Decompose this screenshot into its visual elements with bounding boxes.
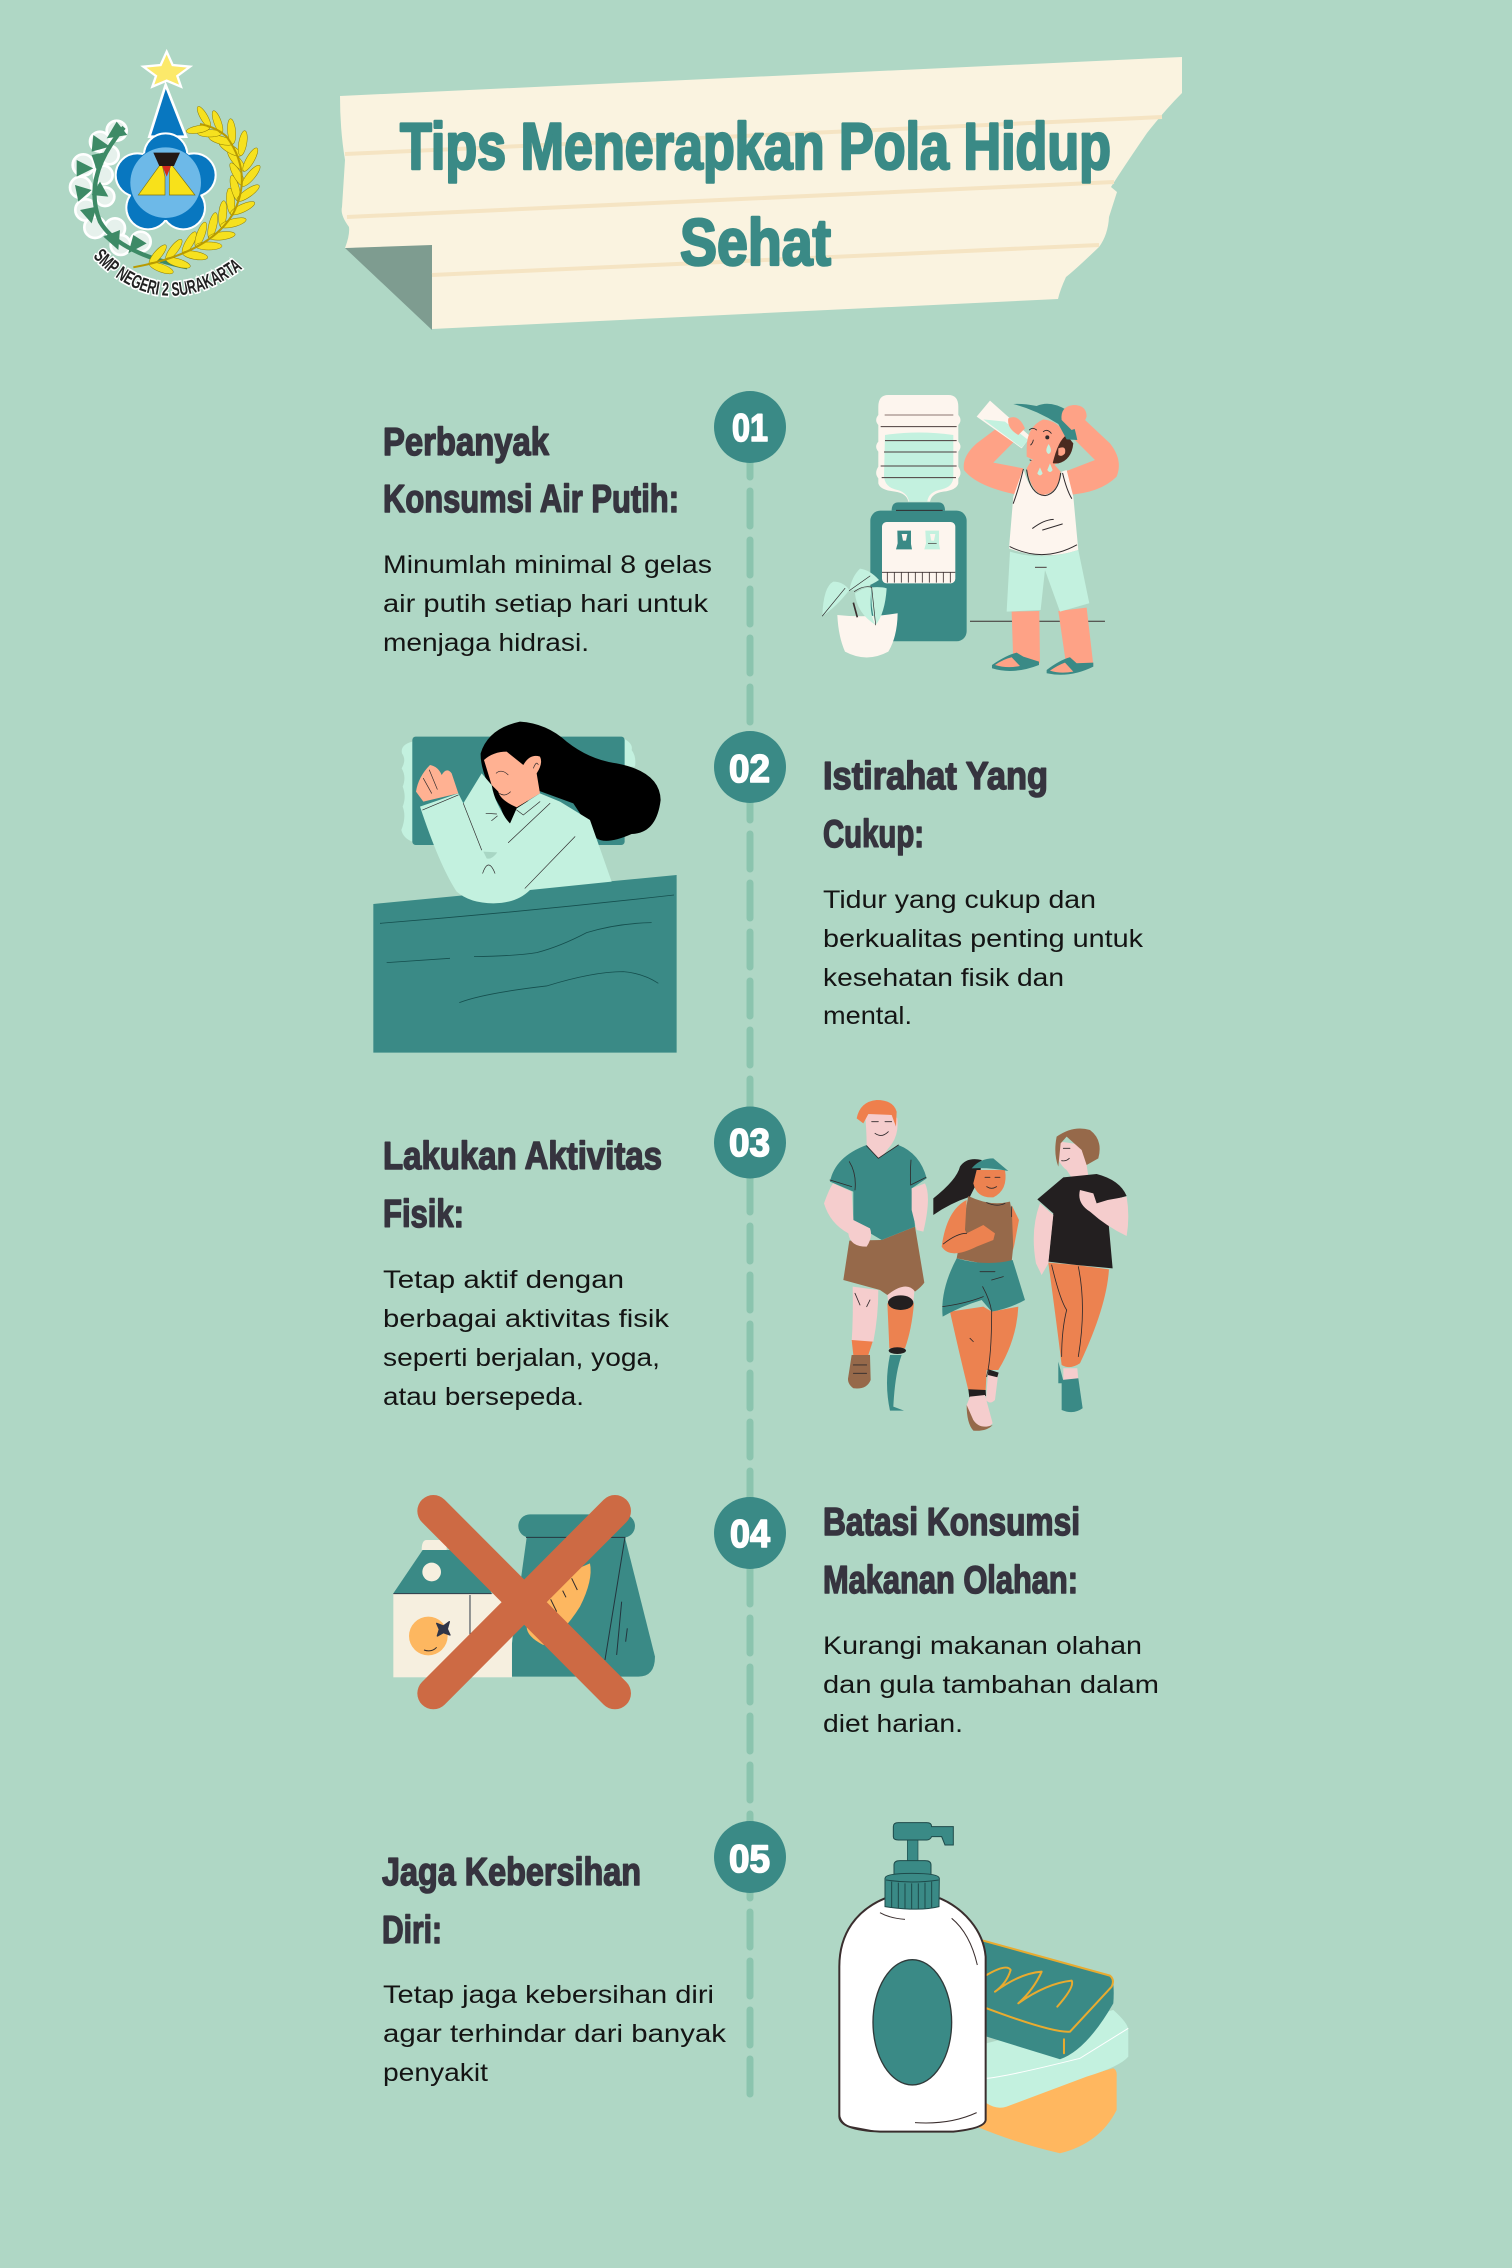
text block: step 04: [823, 1632, 1159, 1738]
text block: step 01: air putih setiap hari untuk: [383, 590, 709, 618]
logo text: school name: SMP NEGERI 2 SURAKARTA: [93, 248, 244, 298]
text block: step 03: seperti berjalan, yoga,: [383, 1344, 660, 1372]
number badge 02: [714, 731, 786, 803]
number badge 01: 01: [732, 407, 768, 450]
logo: SMP Negeri 2 Surakarta emblem: [68, 49, 260, 298]
icon: star: [143, 52, 190, 87]
heading: step 02: [823, 755, 1048, 856]
heading: step 03: Fisik:: [383, 1193, 464, 1236]
heading: step 04: [823, 1501, 1080, 1602]
paper bag: [512, 1514, 655, 1677]
woman in black shirt: [1034, 1128, 1128, 1412]
text block: step 02: mental.: [823, 1002, 912, 1030]
text block: step 03: [383, 1266, 670, 1411]
icon: spire: [149, 85, 186, 137]
heading: step 02: Cukup:: [823, 813, 924, 856]
icon: three people jogging: [824, 1100, 1128, 1431]
icon: blue flower shield: [117, 134, 215, 228]
number badge 03: [714, 1106, 786, 1178]
title: [400, 109, 1111, 279]
man: [824, 1100, 928, 1411]
number badge 03: 03: [729, 1122, 770, 1165]
text block: step 05: [383, 1981, 727, 2087]
milk carton: [393, 1540, 512, 1677]
icon: processed food crossed out: [393, 1511, 655, 1693]
text block: step 03: berbagai aktivitas fisik: [383, 1305, 670, 1333]
heading: step 02: Istirahat Yang: [823, 755, 1048, 798]
text block: step 01: Minumlah minimal 8 gelas: [383, 551, 712, 579]
text block: step 01: menjaga hidrasi.: [383, 629, 589, 657]
number badge 04: 04: [730, 1513, 770, 1556]
icon: cotton branch: [70, 121, 187, 267]
icon: woman sleeping: [373, 722, 677, 1053]
woman with cap: [933, 1158, 1025, 1431]
text block: step 02: berkualitas penting untuk: [823, 925, 1144, 953]
title: Tips Menerapkan Pola Hidup: [400, 109, 1111, 183]
timeline dashed line: [746, 442, 754, 2095]
panel: step 01: [383, 391, 1119, 675]
text block: step 05: agar terhindar dari banyak: [383, 2020, 727, 2048]
text block: step 05: Tetap jaga kebersihan diri: [383, 1981, 714, 2009]
heading: step 04: Batasi Konsumsi: [823, 1501, 1080, 1544]
orange soap: [977, 2068, 1117, 2153]
heading: step 01: Perbanyak: [383, 421, 549, 464]
panel: step 03: [383, 1100, 1128, 1431]
bottle: [839, 1823, 986, 2132]
heading: step 03: Lakukan Aktivitas: [383, 1135, 662, 1178]
text block: step 04: Kurangi makanan olahan: [823, 1632, 1142, 1660]
text block: step 04: diet harian.: [823, 1710, 963, 1738]
text block: step 03: atau bersepeda.: [383, 1383, 584, 1411]
paper: [340, 57, 1182, 329]
number badge 04: [714, 1497, 786, 1569]
number badge 01: [714, 391, 786, 463]
heading: step 01: Konsumsi Air Putih:: [383, 478, 679, 521]
banner: torn paper title: [340, 57, 1182, 330]
text block: step 02: Tidur yang cukup dan: [823, 886, 1096, 914]
heading: step 04: Makanan Olahan:: [823, 1559, 1078, 1602]
number badge 05: [714, 1821, 786, 1893]
heading: step 03: [383, 1135, 662, 1236]
number badge 02: 02: [729, 748, 770, 791]
icon: rice stalk: [133, 105, 263, 276]
mint soap: [987, 2010, 1128, 2108]
text block: step 02: [823, 886, 1144, 1030]
heading: step 05: Diri:: [382, 1909, 442, 1952]
heading: step 05: [382, 1851, 641, 1952]
panel: step 02: [373, 722, 1144, 1053]
panel: step 05: [382, 1821, 1128, 2153]
teal soap: [983, 1940, 1114, 2059]
heading: step 05: Jaga Kebersihan: [382, 1851, 641, 1894]
cross mark: [433, 1511, 615, 1693]
number badge 05: 05: [729, 1838, 770, 1881]
text block: step 02: kesehatan fisik dan: [823, 964, 1064, 992]
heading: step 01: [383, 421, 679, 521]
text block: step 01: [383, 551, 712, 657]
text block: step 03: Tetap aktif dengan: [383, 1266, 624, 1294]
fold shadow: [345, 244, 432, 330]
text block: step 04: dan gula tambahan dalam: [823, 1671, 1159, 1699]
panel: step 04: [393, 1497, 1159, 1738]
icon: soap bottle and soap bars: [839, 1823, 1128, 2153]
icon: water cooler and man drinking: [822, 395, 1119, 675]
text block: step 05: penyakit: [383, 2059, 488, 2087]
title: Sehat: [680, 205, 831, 279]
